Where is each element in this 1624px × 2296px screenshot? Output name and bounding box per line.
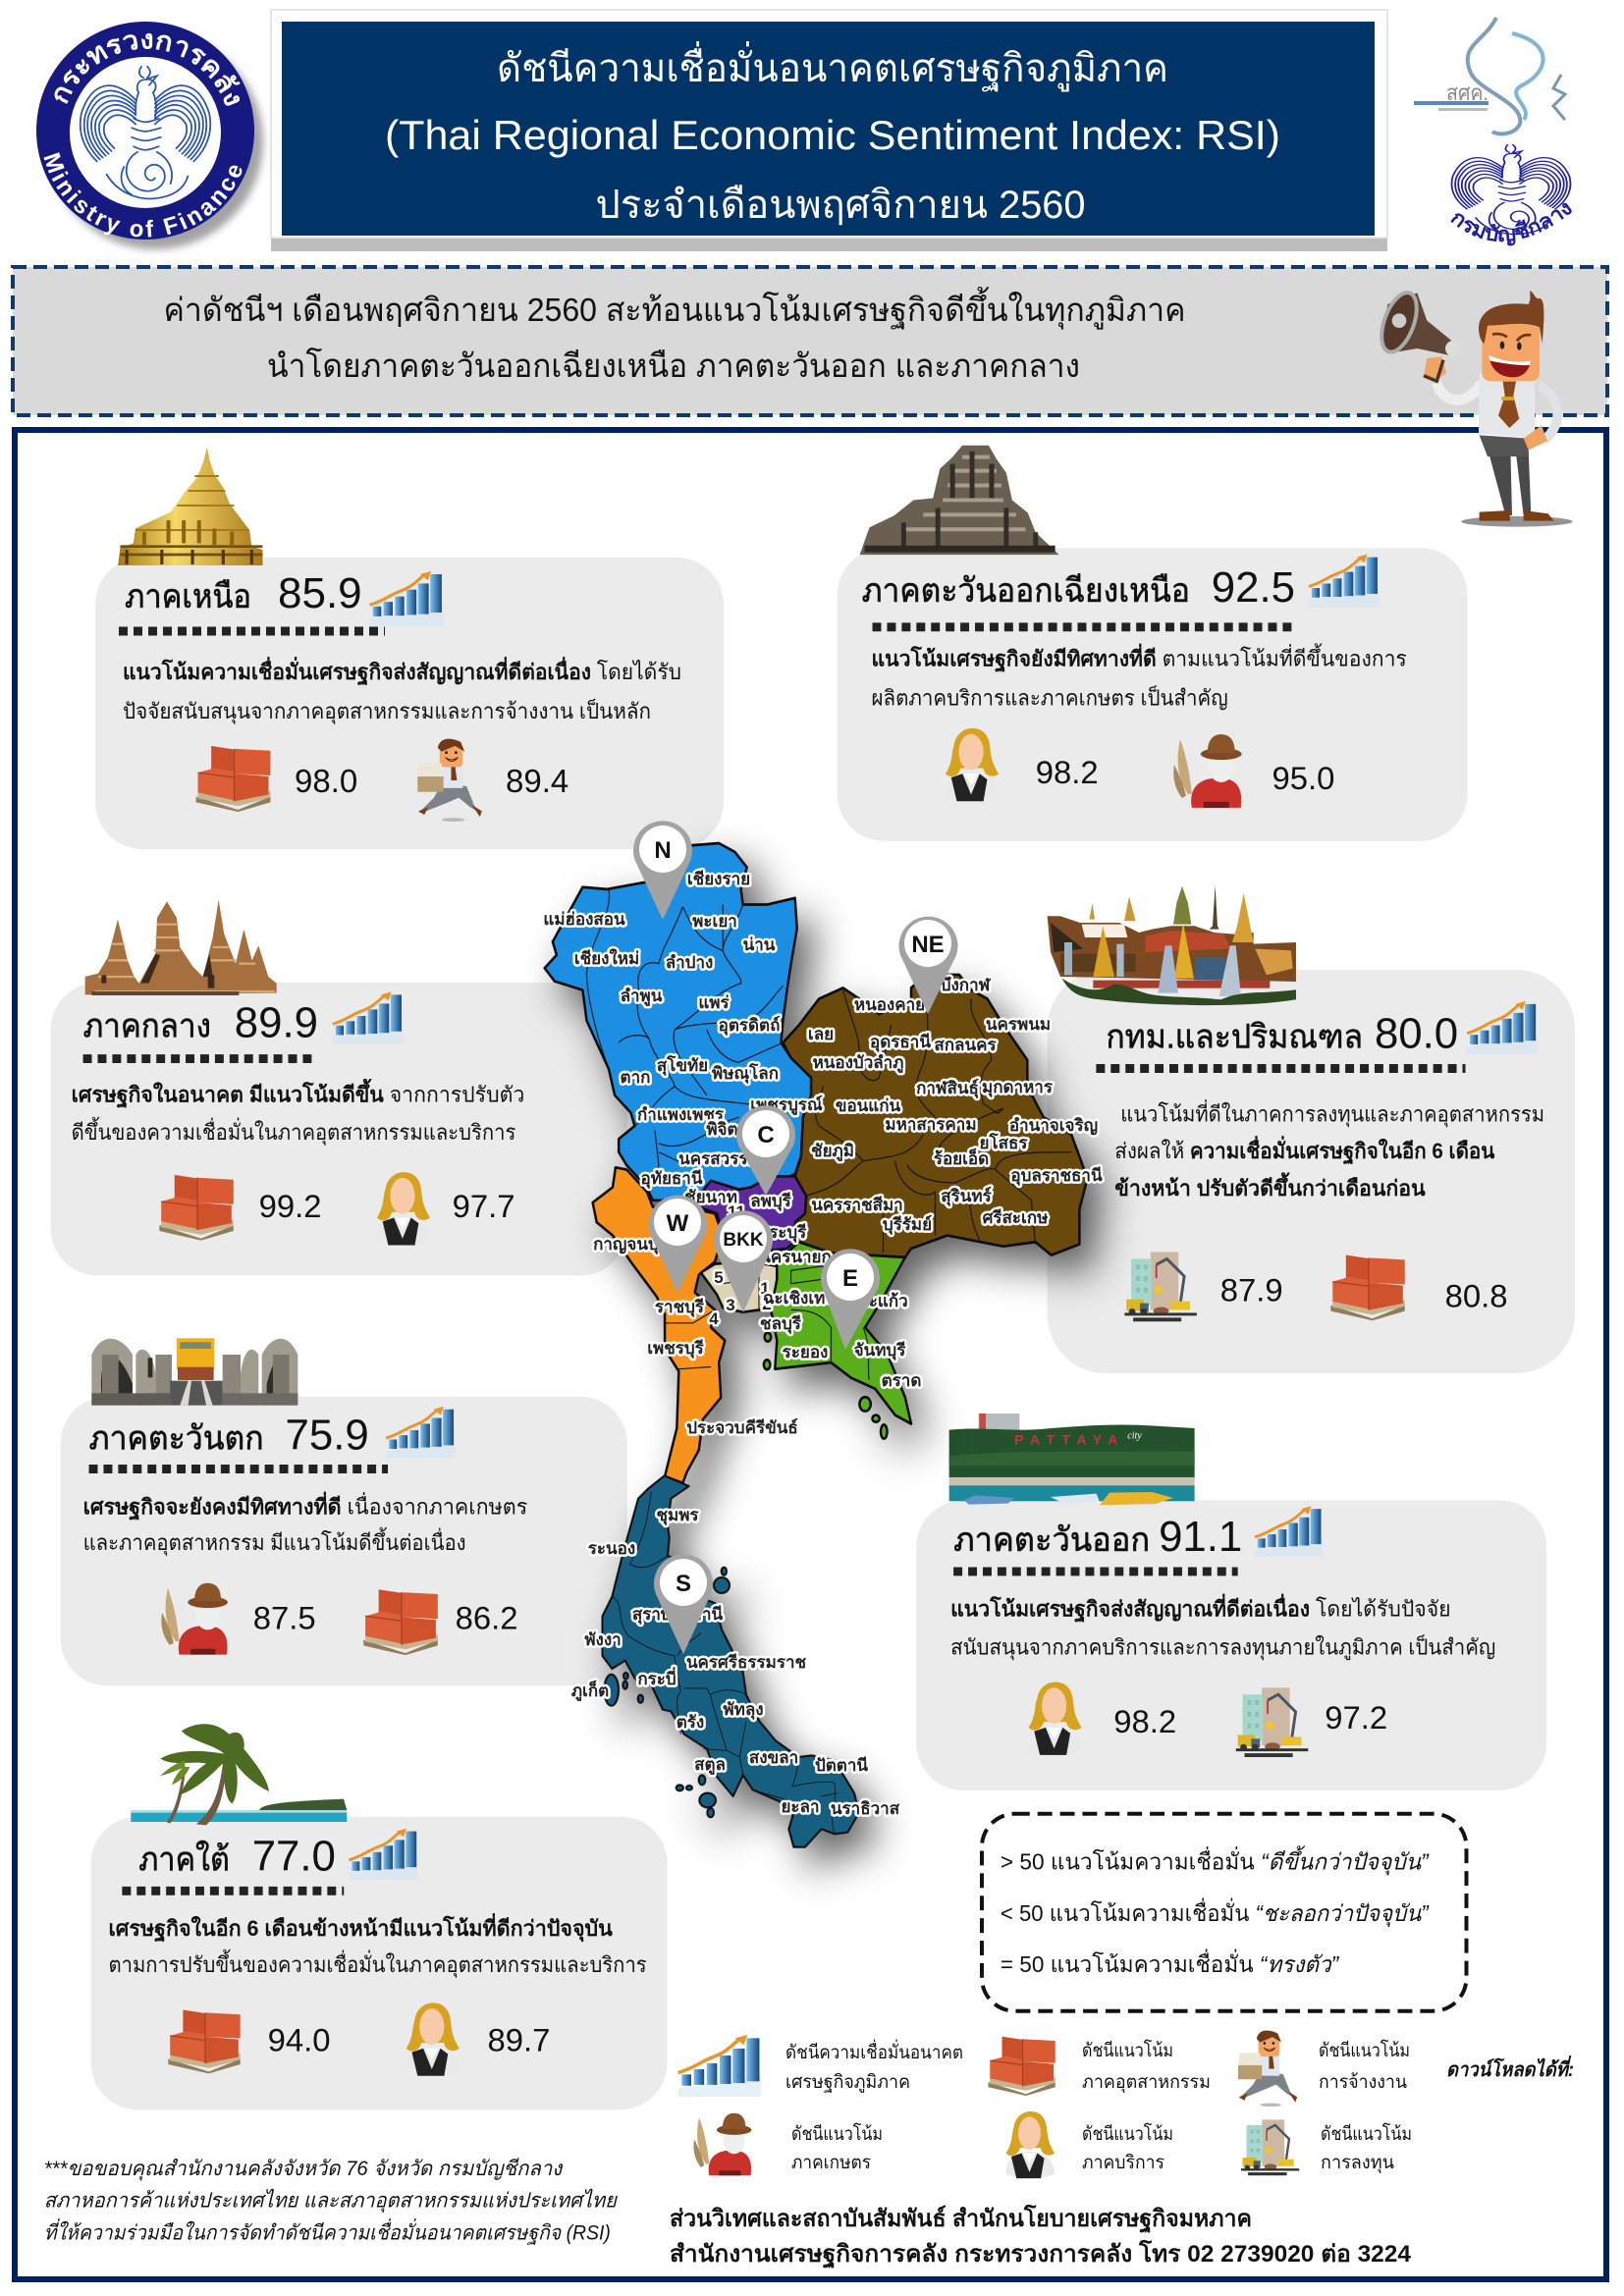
value: investment: 97.2 <box>1325 1699 1387 1735</box>
legend item: services <box>1006 2111 1173 2178</box>
value: services: 97.7 <box>453 1188 515 1224</box>
map: province labels: หนองคาย <box>854 995 925 1014</box>
body text: แนวโน้มเศรษฐกิจส่งสัญญาณที่ดีต่อเนื่อง โดยได้รับปัจจัย <box>950 1594 1451 1624</box>
heading: ภาคตะวันตก <box>89 1420 264 1458</box>
map: province labels: สุรินทร์ <box>941 1186 993 1206</box>
pin: W <box>648 1196 707 1293</box>
heading: ภาคกลาง <box>83 1008 211 1045</box>
map: province labels: ร้อยเอ็ด <box>934 1147 989 1168</box>
main frame <box>15 430 1606 2279</box>
map: province labels: ยโสธร <box>980 1133 1028 1152</box>
map: province labels: ระยอง <box>783 1343 828 1362</box>
title banner <box>271 10 1387 251</box>
contact <box>670 2204 1412 2269</box>
map: province labels: พิจิตร <box>706 1120 748 1139</box>
photo: palm beach <box>131 1724 347 1825</box>
map: province labels: สุราษฎร์ธานี <box>632 1604 724 1625</box>
logo: Ministry of Finance seal: กระทรวงการคลัง <box>55 33 241 106</box>
icon: agriculture <box>1173 734 1242 808</box>
headline banner <box>13 267 1607 415</box>
legend item: RSI: ดัชนีความเชื่อมั่นอนาคต <box>785 2039 963 2063</box>
body text <box>123 656 681 724</box>
pin: NE <box>899 917 958 1014</box>
map: province labels: ราชบุรี <box>655 1297 705 1317</box>
map: province labels: 2 <box>762 1295 772 1313</box>
icon: investment <box>1236 1687 1308 1757</box>
map: province labels: 11 <box>728 1202 745 1221</box>
map: province labels: 5 <box>714 1268 724 1287</box>
map: province labels: ลำปาง <box>666 953 713 972</box>
pin: C: C <box>757 1122 775 1148</box>
value: services: 98.2 <box>1036 754 1099 790</box>
legend item: employment: ดัชนีแนวโน้ม <box>1319 2039 1410 2061</box>
title banner: ประจำเดือนพฤศจิกายน 2560 <box>595 184 1086 227</box>
icon: services <box>377 1172 430 1246</box>
legend: thresholds <box>982 1814 1466 2011</box>
map: province labels: ตาก <box>621 1068 650 1087</box>
value: 92.5 <box>1212 563 1295 612</box>
panel: South <box>91 1724 668 2109</box>
icon: index chart <box>370 571 443 626</box>
map: province labels: นครสวรรค์ <box>678 1148 759 1168</box>
map: province labels: พิษณุโลก <box>712 1063 779 1084</box>
map: province labels: อุทัยธานี <box>641 1168 703 1189</box>
photo: Pattaya: PATTAYA <box>1014 1431 1117 1447</box>
map: province labels: เพชรบุรี <box>647 1338 705 1359</box>
map: province labels: ชัยภูมิ <box>811 1142 854 1162</box>
map: province labels: มุกดาหาร <box>982 1078 1054 1097</box>
region: South <box>602 1475 859 1847</box>
value: agriculture: 95.0 <box>1272 760 1334 796</box>
map: province labels: ภูเก็ต <box>571 1679 609 1702</box>
map: province labels: นครศรีธรรมราช <box>686 1652 807 1672</box>
map: province labels: เลย <box>808 1025 834 1043</box>
value: employment: 89.4 <box>506 763 568 799</box>
map: province labels: ลำพูน <box>621 987 663 1007</box>
pin: C <box>736 1105 795 1196</box>
legend item: investment <box>1241 2119 1412 2175</box>
map: province labels: แม่ฮ่องสอน <box>543 910 625 929</box>
map: province labels: พังงา <box>584 1630 622 1649</box>
map: province borders <box>587 889 1071 1380</box>
map: province labels: 3 <box>726 1296 735 1314</box>
map: province labels: บึงกาฬ <box>941 976 992 994</box>
map: province labels: พะเยา <box>692 912 737 931</box>
map: province labels: สระบุรี <box>759 1222 807 1243</box>
footnote: สภาหอการค้าแห่งประเทศไทย และสภาอุตสาหกรรมแห่งประเทศไทย <box>44 2189 619 2214</box>
icon: index chart <box>1255 1506 1323 1557</box>
map: province labels: พัทลุง <box>723 1700 764 1720</box>
icon: index chart <box>333 991 403 1044</box>
title banner: (Thai Regional Economic Sentiment Index: RSI) <box>385 112 1280 158</box>
map: province labels: 1 <box>760 1279 770 1298</box>
heading: ภาคใต้ <box>138 1840 230 1878</box>
value: industry: 80.8 <box>1445 1277 1508 1313</box>
map: province labels: หนองบัวลำภู <box>813 1053 903 1074</box>
footnote <box>44 2158 619 2246</box>
body text <box>108 1913 647 1978</box>
map: province labels: กาญจนบุรี <box>593 1234 669 1255</box>
map: province labels: เชียงใหม่ <box>574 948 639 968</box>
body text <box>1114 1099 1544 1201</box>
body text: สนับสนุนจากภาคบริการและการลงทุนภายในภูมิภาค เป็นสำคัญ <box>950 1633 1495 1661</box>
value: 77.0 <box>252 1832 336 1880</box>
value: 80.0 <box>1375 1010 1458 1058</box>
heading: กทม.และปริมณฑล <box>1106 1019 1363 1056</box>
logo: Ministry of Finance seal: Ministry of Finance <box>43 152 242 238</box>
contact: สำนักงานเศรษฐกิจการคลัง กระทรวงการคลัง โทร 02 2739020 ต่อ 3224 <box>670 2239 1412 2269</box>
value: industry: 94.0 <box>268 2022 331 2058</box>
value: industry: 98.0 <box>295 763 357 799</box>
map: province labels: นครพนม <box>986 1015 1051 1034</box>
map: province labels: ชลบุรี <box>760 1313 802 1334</box>
logo: fiscal policy office: สศค. <box>1446 80 1489 105</box>
map: province labels: จันทบุรี <box>854 1340 906 1361</box>
map: province labels: อุดรธานี <box>870 1032 931 1052</box>
map: province labels: อุบลราชธานี <box>1010 1165 1103 1186</box>
map: province labels: สงขลา <box>749 1748 798 1767</box>
map: province labels: บุรีรัมย์ <box>883 1214 932 1235</box>
map: province labels <box>543 869 1103 1818</box>
body text: ผลิตภาคบริการและภาคเกษตร เป็นสำคัญ <box>872 683 1228 710</box>
headline banner: นำโดยภาคตะวันออกเฉียงเหนือ ภาคตะวันออก และภาคกลาง <box>267 347 1080 384</box>
map: province labels: สกลนคร <box>934 1036 997 1054</box>
map: province labels: อำนาจเจริญ <box>1009 1116 1098 1136</box>
icon: industry <box>196 746 270 812</box>
map: province labels: สุโขทัย <box>657 1055 708 1076</box>
body text: แนวโน้มความเชื่อมั่นเศรษฐกิจส่งสัญญาณที่ดีต่อเนื่อง โดยได้รับ <box>123 656 681 686</box>
map: province labels: อุตรดิตถ์ <box>719 1015 780 1036</box>
legend item: investment: การลงทุน <box>1321 2153 1394 2174</box>
value: services: 89.7 <box>488 2022 550 2058</box>
legend: thresholds: > 50 แนวโน้มความเชื่อมั่น “ดีขึ้นกว่าปัจจุบัน” <box>1001 1844 1430 1875</box>
map: province labels: ระนอง <box>588 1539 635 1558</box>
icon: services <box>1029 1682 1082 1755</box>
photo: railway bridge <box>91 1338 298 1406</box>
region: upper regions <box>545 843 1088 1483</box>
legend item: industry: ภาคอุตสาหกรรม <box>1082 2072 1211 2094</box>
icon: industry <box>363 1589 438 1655</box>
body text <box>83 1491 528 1556</box>
value: investment: 87.9 <box>1220 1271 1283 1308</box>
panel: West <box>61 1338 627 1685</box>
map: province labels: ตราด <box>882 1371 921 1390</box>
map: regions <box>545 843 1088 1847</box>
icon: services <box>946 728 999 801</box>
legend item: employment <box>1238 2031 1410 2107</box>
map: province labels: แพร่ <box>698 993 731 1012</box>
photo: Pattaya <box>949 1414 1195 1505</box>
map: province labels: เพชรบูรณ์ <box>750 1095 823 1116</box>
body text: เศรษฐกิจในอนาคต มีแนวโน้มดีขึ้น จากการปรับตัว <box>72 1078 524 1108</box>
icon: services <box>406 2002 460 2076</box>
legend item: industry: ดัชนีแนวโน้ม <box>1082 2039 1173 2061</box>
icon: agriculture <box>161 1583 228 1655</box>
value: 85.9 <box>278 569 362 617</box>
icon: index chart <box>1467 1001 1538 1054</box>
logo: Comptroller General's Department <box>1450 143 1572 245</box>
pin: S <box>654 1554 713 1654</box>
body text <box>72 1078 524 1146</box>
value: 91.1 <box>1159 1513 1242 1561</box>
map: province labels: ขอนแก่น <box>836 1096 901 1115</box>
legend item: RSI: เศรษฐกิจภูมิภาค <box>785 2072 910 2093</box>
map: province labels: น่าน <box>743 935 776 954</box>
icon: index chart <box>349 1829 418 1880</box>
body text: และภาคอุตสาหกรรม มีแนวโน้มดีขึ้นต่อเนื่อง <box>83 1527 466 1556</box>
map: province labels: ศรีสะเกษ <box>983 1207 1048 1227</box>
map: province labels: มหาสารคาม <box>885 1115 977 1134</box>
heading: ภาคตะวันออก <box>953 1522 1150 1559</box>
body text: แนวโน้มที่ดีในภาคการลงทุนและภาคอุตสาหกรรม <box>1120 1099 1544 1127</box>
heading: ภาคเหนือ <box>125 578 251 615</box>
body text: ดีขึ้นของความเชื่อมั่นในภาคอุตสาหกรรมและบริการ <box>72 1117 516 1146</box>
map of Thailand <box>543 821 1103 1847</box>
body text: เศรษฐกิจจะยังคงมีทิศทางที่ดี เนื่องจากภาคเกษตร <box>83 1491 528 1521</box>
map: province labels: ชัยนาท <box>684 1188 737 1206</box>
map: province labels: สตูล <box>694 1755 726 1776</box>
panel: Northeast <box>838 446 1467 841</box>
icon: index chart <box>1309 555 1379 607</box>
body text: ส่งผลให้ ความเชื่อมั่นเศรษฐกิจในอีก 6 เดือน <box>1114 1136 1494 1165</box>
body text: ข้างหน้า ปรับตัวดีขึ้นกว่าเดือนก่อน <box>1114 1172 1426 1201</box>
map: province labels: กระบี่ <box>637 1667 677 1688</box>
panel: East <box>916 1414 1546 1790</box>
legend: icons <box>678 2031 1412 2178</box>
legend item: agriculture: ภาคเกษตร <box>791 2153 871 2173</box>
map: province labels: นราธิวาส <box>831 1799 900 1818</box>
panel: Bangkok and vicinity <box>1048 885 1575 1373</box>
legend: thresholds: < 50 แนวโน้มความเชื่อมั่น “ชะลอกว่าปัจจุบัน” <box>1001 1897 1430 1927</box>
value: industry: 86.2 <box>456 1600 518 1636</box>
logo: Ministry of Finance seal <box>36 22 268 254</box>
map: province labels: 4 <box>709 1309 719 1328</box>
body text: เศรษฐกิจในอีก 6 เดือนข้างหน้ามีแนวโน้มที่ดีกว่าปัจจุบัน <box>108 1913 613 1943</box>
value: 89.9 <box>235 999 318 1047</box>
body text <box>872 644 1407 710</box>
map: province labels: นครนายก <box>759 1248 832 1266</box>
panel: North <box>95 447 724 849</box>
legend item: services: ดัชนีแนวโน้ม <box>1082 2122 1173 2145</box>
pin: N: N <box>654 837 672 864</box>
pin: E <box>821 1249 880 1350</box>
value: agriculture: 87.5 <box>253 1600 316 1636</box>
pin: N <box>633 821 692 920</box>
panel: Central <box>51 900 627 1275</box>
download note: ดาวน์โหลดได้ที่: <box>1446 2056 1574 2081</box>
heading: ภาคตะวันออกเฉียงเหนือ <box>862 572 1190 610</box>
map: province labels: สระแก้ว <box>849 1292 908 1310</box>
contact: ส่วนวิเทศและสถาบันสัมพันธ์ สำนักนโยบายเศรษฐกิจมหภาค <box>670 2204 1252 2234</box>
icon: industry <box>1330 1255 1405 1320</box>
photo: Pattaya: city <box>1127 1430 1142 1441</box>
map: province labels: ยะลา <box>781 1797 820 1816</box>
logo: Comptroller General's Department: กรมบัญชีกลาง <box>1450 202 1572 245</box>
icon: index chart <box>386 1407 456 1459</box>
legend item: employment: การจ้างงาน <box>1319 2072 1407 2093</box>
map: province labels: ฉะเชิงเทรา <box>763 1289 843 1308</box>
photo: golden stupa <box>118 447 262 565</box>
map: province labels: กาฬสินธุ์ <box>916 1078 979 1098</box>
value: services: 98.2 <box>1113 1703 1176 1739</box>
map: province labels: เชียงราย <box>687 869 750 888</box>
map: province labels: ปัตตานี <box>815 1755 868 1775</box>
photo: Khmer temple <box>860 446 1059 555</box>
body text <box>950 1594 1495 1661</box>
legend item: investment: ดัชนีแนวโน้ม <box>1321 2122 1412 2145</box>
body text: ปัจจัยสนับสนุนจากภาคอุตสาหกรรมและการจ้างงาน เป็นหลัก <box>123 697 651 724</box>
legend item: agriculture: ดัชนีแนวโน้ม <box>791 2122 883 2145</box>
value: industry: 99.2 <box>259 1188 322 1224</box>
pin: NE: NE <box>911 932 945 958</box>
pin: BKK <box>714 1210 773 1312</box>
map: province labels: ชุมพร <box>656 1506 699 1525</box>
map: province labels: ตรัง <box>677 1713 704 1732</box>
icon: employment <box>417 739 482 822</box>
body text: แนวโน้มเศรษฐกิจยังมีทิศทางที่ดี ตามแนวโน้มที่ดีขึ้นของการ <box>872 644 1407 673</box>
map: province labels: นครราชสีมา <box>811 1195 903 1214</box>
value: 75.9 <box>286 1412 369 1460</box>
pin: E: E <box>842 1265 858 1292</box>
legend item: RSI <box>678 2035 963 2097</box>
headline banner: ค่าดัชนีฯ เดือนพฤศจิกายน 2560 สะท้อนแนวโน้มเศรษฐกิจดีขึ้นในทุกภูมิภาค <box>163 287 1186 330</box>
map: province labels: กำแพงเพชร <box>637 1105 725 1124</box>
title banner: ดัชนีความเชื่อมั่นอนาคตเศรษฐกิจภูมิภาค <box>497 41 1168 92</box>
pin: W: W <box>667 1210 689 1237</box>
character: man with megaphone <box>1375 288 1573 527</box>
legend item: agriculture <box>693 2113 883 2175</box>
legend: thresholds: = 50 แนวโน้มความเชื่อมั่น “ทรงตัว” <box>1001 1949 1339 1977</box>
photo: Ayutthaya ruins <box>85 900 277 995</box>
pin: BKK: BKK <box>723 1230 764 1251</box>
logo: fiscal policy office <box>1414 18 1565 133</box>
icon: industry <box>168 2010 241 2073</box>
legend item: industry <box>988 2037 1211 2096</box>
photo: Grand Palace <box>1048 885 1296 1005</box>
footnote: ***ขอขอบคุณสำนักงานคลังจังหวัด 76 จังหวัด กรมบัญชีกลาง <box>44 2158 564 2181</box>
map: province labels: ประจวบคีรีขันธ์ <box>686 1417 798 1437</box>
footnote: ที่ให้ความร่วมมือในการจัดทำดัชนีความเชื่อมั่นอนาคตเศรษฐกิจ (RSI) <box>44 2218 611 2246</box>
icon: industry <box>159 1175 234 1241</box>
icon: investment <box>1124 1253 1197 1321</box>
pin: S: S <box>676 1571 691 1597</box>
body text: ตามการปรับขึ้นของความเชื่อมั่นในภาคอุตสาหกรรมและบริการ <box>108 1949 647 1978</box>
legend item: services: ภาคบริการ <box>1082 2153 1164 2173</box>
map: province labels: ลพบุรี <box>750 1191 792 1211</box>
